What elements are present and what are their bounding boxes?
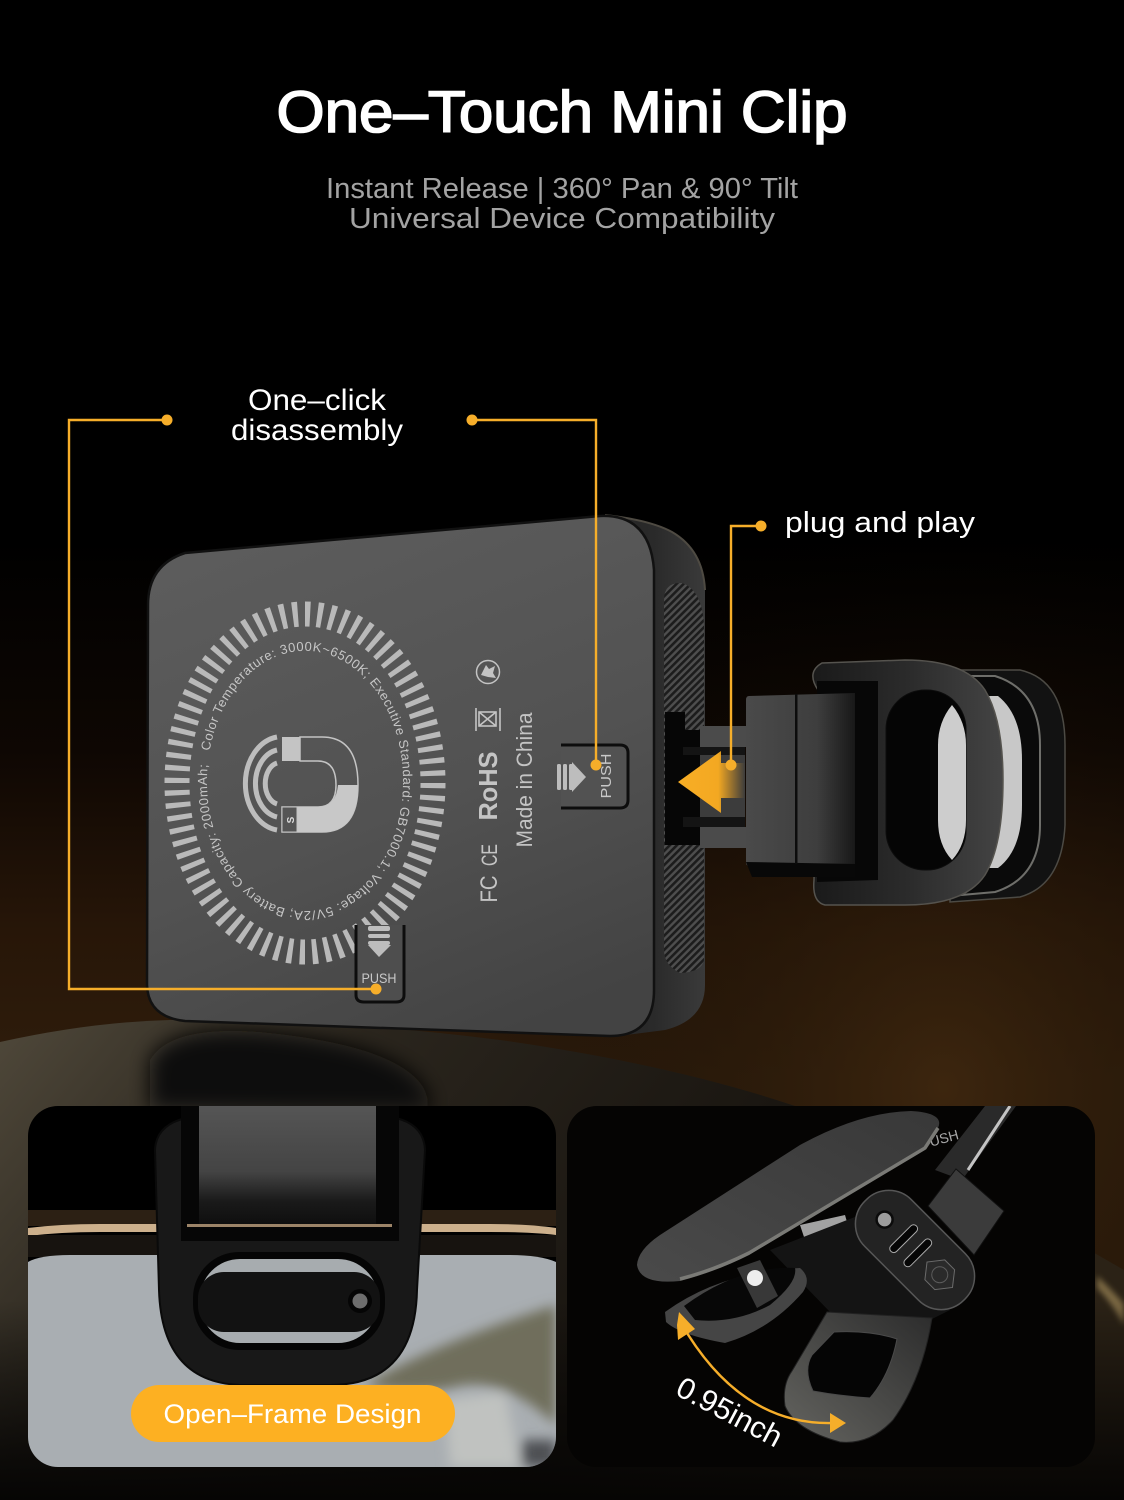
back layers (950, 670, 1065, 902)
window pill (938, 705, 966, 860)
clip window (181, 1106, 399, 1241)
box (746, 693, 855, 866)
subtitle: Instant Release | 360° Pan & 90° Tilt (326, 173, 798, 205)
label pill: open-frame design (131, 1385, 455, 1442)
callout: plug and play (726, 507, 976, 770)
lower jaw (665, 1268, 807, 1343)
scenery (365, 1305, 556, 1467)
cert marks: RoHS (473, 752, 503, 820)
clip front (155, 1106, 425, 1385)
push tab bottom: PUSH (362, 970, 396, 986)
loop (784, 1312, 932, 1442)
D frame (813, 660, 1003, 905)
hole (886, 690, 966, 870)
callout: one-click disassembly: One–click (248, 384, 387, 417)
knob (854, 1190, 976, 1310)
panel: open-frame design (28, 1106, 556, 1467)
lens slot (193, 1252, 385, 1350)
phone frame (28, 1210, 556, 1226)
push tab right: PUSH (598, 754, 615, 798)
cert marks (473, 660, 503, 902)
phone screen (28, 1255, 556, 1467)
cert marks: FC (476, 876, 503, 902)
subtitle: Universal Device Compatibility (349, 203, 776, 235)
panel: clip width: PUSH (919, 1126, 960, 1152)
push tab bottom (356, 925, 404, 1002)
push tab right (557, 745, 628, 808)
body side (500, 515, 705, 1037)
dashboard curve (0, 1020, 1124, 1500)
arrow: insertion direction (678, 751, 745, 813)
arm (935, 1106, 1016, 1180)
callout: plug and play: plug and play (785, 507, 976, 539)
inner body (770, 1215, 950, 1320)
callout: one-click disassembly (69, 384, 602, 994)
made in china: Made in China (512, 712, 537, 848)
label pill: open-frame design: Open–Frame Design (164, 1399, 422, 1429)
block (928, 1169, 1004, 1255)
callout: one-click disassembly: disassembly (231, 414, 403, 447)
subtitle (326, 173, 798, 235)
face (147, 516, 654, 1036)
panel: clip width (567, 1106, 1095, 1467)
white strip (985, 696, 1022, 868)
cert marks: CE (477, 844, 502, 866)
clip attachment (665, 660, 1065, 905)
hatched grip (664, 583, 704, 973)
magnet icon (245, 737, 358, 832)
top plate (637, 1111, 939, 1282)
magnet ring ticks (177, 614, 433, 952)
dimension label: 0.95inch (671, 1371, 788, 1454)
connector arms (700, 726, 746, 747)
magnet icon: S (286, 816, 297, 823)
main device: magnetic light body (146, 514, 706, 1038)
title: One–Touch Mini Clip (276, 80, 848, 145)
dimension arrow (677, 1312, 846, 1433)
spring (800, 1215, 846, 1237)
ring text: Color Temperature: 3000K~6500K; Executive Standard: GB7000.1; Voltage: 5V/2A; Battery Capacity: 2000mAh; (198, 642, 412, 920)
